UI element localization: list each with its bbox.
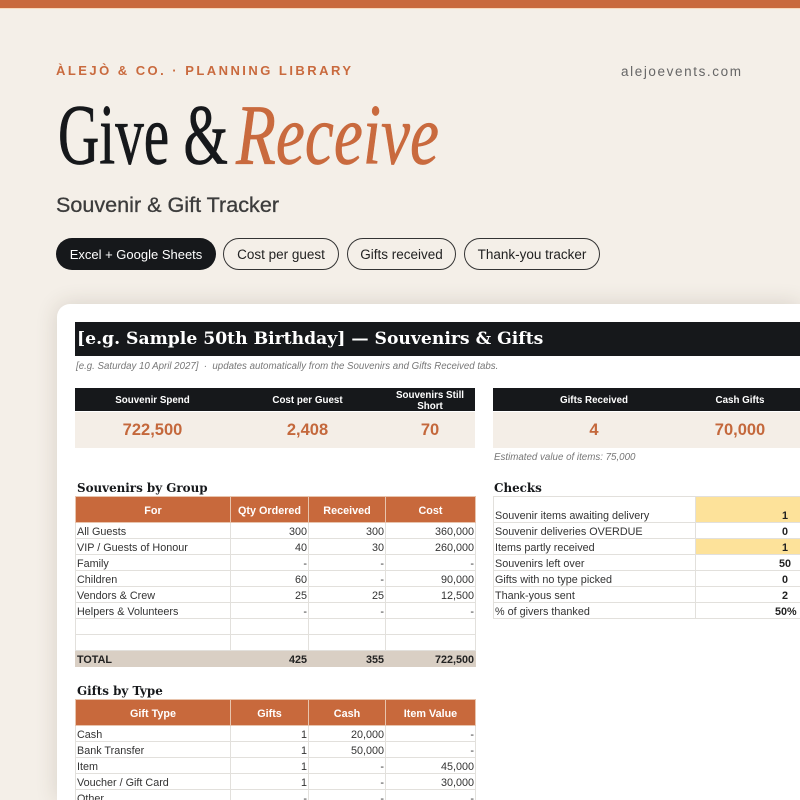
title: Give &: Give & (58, 86, 228, 182)
table: Souvenirs by Group: 30 (372, 542, 384, 554)
table: Souvenirs by Group: - (380, 574, 384, 586)
KPI block: souvenirs: Cost per Guest (272, 395, 343, 406)
table: Checks (493, 496, 800, 619)
KPI block: souvenirs: Short (417, 400, 443, 412)
KPI block: gifts: Cash Gifts (716, 395, 764, 406)
table: Gifts by Type: 20,000 (351, 729, 384, 741)
KPI block: gifts (493, 388, 800, 448)
table: Souvenirs by Group: Family (77, 558, 109, 570)
table: Souvenirs by Group: 90,000 (441, 574, 474, 586)
table: Souvenirs by Group: 360,000 (435, 526, 474, 538)
table: Checks: Gifts with no type picked (495, 574, 612, 586)
table: Souvenirs by Group: 722,500 (435, 654, 474, 666)
table: Checks: 1 (782, 542, 788, 554)
pill: Gifts received (347, 238, 456, 270)
table: Souvenirs by Group: For (144, 505, 162, 517)
table: Gifts by Type: 45,000 (441, 761, 474, 773)
table: Checks: 2 (782, 590, 788, 602)
KPI block: souvenirs (75, 388, 475, 448)
sheet subtitle: [e.g. Saturday 10 April 2027] · updates automatically from the Souvenirs and Gifts Received tabs. (76, 361, 498, 372)
table: Souvenirs by Group: - (380, 558, 384, 570)
table: Souvenirs by Group: 300 (366, 526, 384, 538)
table: Gifts by Type: Voucher / Gift Card (77, 777, 169, 789)
table: Gifts by Type: Gift Type (130, 708, 176, 720)
table: Gifts by Type: 50,000 (351, 745, 384, 757)
table: Checks: 50% (775, 606, 797, 618)
table: Gifts by Type: Cash (334, 708, 360, 720)
table: Gifts by Type: Cash (77, 729, 102, 741)
sheet title bar (75, 322, 800, 356)
KPI block: souvenirs: 722,500 (123, 421, 182, 439)
table: Checks: % of givers thanked (495, 606, 590, 618)
table: Gifts by Type: Bank Transfer (77, 745, 144, 757)
table: Souvenirs by Group: Children (77, 574, 117, 586)
table: Souvenirs by Group: Received (323, 505, 371, 517)
panel: spreadsheet card (57, 304, 800, 800)
pill: Excel + Google Sheets: Excel + Google Sheets (70, 247, 202, 262)
table: Souvenirs by Group: 425 (289, 654, 307, 666)
table: Gifts by Type: 1 (301, 729, 307, 741)
pill: Excel + Google Sheets (56, 238, 216, 270)
sheet title bar: [e.g. Sample 50th Birthday] — Souvenirs & Gifts (77, 329, 543, 349)
table: Gifts by Type: 30,000 (441, 777, 474, 789)
table: Souvenirs by Group: Qty Ordered (238, 505, 301, 517)
pill: Cost per guest (223, 238, 339, 270)
heading: Checks: Checks (494, 481, 542, 495)
table: Checks: Items partly received (495, 542, 595, 554)
table: Souvenirs by Group: 12,500 (441, 590, 474, 602)
website: alejoevents.com (621, 64, 741, 79)
pill: Gifts received: Gifts received (360, 247, 443, 262)
table: Gifts by Type: - (380, 777, 384, 789)
table: Gifts by Type: 1 (301, 777, 307, 789)
heading: Souvenirs by Group: Souvenirs by Group (77, 481, 208, 495)
table: Checks: 0 (782, 574, 788, 586)
table: Souvenirs by Group: Helpers & Volunteers (77, 606, 178, 618)
KPI block: souvenirs: Souvenir Spend (115, 395, 190, 406)
table: Souvenirs by Group: - (303, 558, 307, 570)
table: Gifts by Type: Gifts (257, 708, 282, 720)
table: Souvenirs by Group: 300 (289, 526, 307, 538)
eyebrow: ÀLEJÒ & CO. · PLANNING LIBRARY (56, 63, 351, 78)
table: Checks: Thank-yous sent (495, 590, 575, 602)
table: Gifts by Type: - (470, 745, 474, 757)
table: Gifts by Type (75, 699, 476, 800)
KPI block: souvenirs: 2,408 (287, 421, 328, 439)
table: Souvenirs by Group: 355 (366, 654, 384, 666)
table: Souvenirs by Group: - (470, 606, 474, 618)
table: Gifts by Type: Item Value (404, 708, 457, 720)
KPI block: gifts: Gifts Received (560, 395, 628, 406)
table: Gifts by Type: - (470, 729, 474, 741)
table: Souvenirs by Group: 60 (295, 574, 307, 586)
table: Souvenirs by Group: 25 (295, 590, 307, 602)
table: Souvenirs by Group (75, 496, 476, 667)
KPI block: gifts: 70,000 (715, 421, 765, 439)
pill: Cost per guest: Cost per guest (237, 247, 325, 262)
table: Checks: Souvenir items awaiting delivery (495, 510, 649, 522)
table: Souvenirs by Group: 25 (372, 590, 384, 602)
KPI block: souvenirs: 70 (421, 421, 439, 439)
top accent bar (0, 0, 800, 9)
table: Checks: Souvenirs left over (495, 558, 584, 570)
table: Gifts by Type: 1 (301, 761, 307, 773)
subtitle: Souvenir & Gift Tracker (56, 194, 279, 217)
table: Souvenirs by Group: TOTAL (77, 654, 112, 666)
estimated value note: Estimated value of items: 75,000 (494, 452, 635, 463)
table: Checks: 1 (782, 510, 788, 522)
table: Souvenirs by Group: VIP / Guests of Honour (77, 542, 188, 554)
table: Checks: 50 (779, 558, 791, 570)
table: Gifts by Type: Item (77, 761, 98, 773)
table: Souvenirs by Group: 40 (295, 542, 307, 554)
header text group (56, 63, 741, 217)
heading: Gifts by Type: Gifts by Type (77, 684, 163, 698)
table: Gifts by Type: 1 (301, 745, 307, 757)
table: Souvenirs by Group: - (380, 606, 384, 618)
table: Souvenirs by Group: - (470, 558, 474, 570)
table: Gifts by Type: - (380, 761, 384, 773)
table: Souvenirs by Group: 260,000 (435, 542, 474, 554)
title: Receive: Receive (235, 86, 439, 182)
KPI block: souvenirs: Souvenirs Still (396, 390, 464, 401)
table: Souvenirs by Group: All Guests (77, 526, 126, 538)
table: Checks: Souvenir deliveries OVERDUE (495, 526, 643, 538)
table: Souvenirs by Group: Cost (418, 505, 442, 517)
table: Souvenirs by Group: - (303, 606, 307, 618)
KPI block: gifts: 4 (589, 421, 599, 439)
pill: Thank-you tracker: Thank-you tracker (478, 247, 586, 262)
table: Souvenirs by Group: Vendors & Crew (77, 590, 155, 602)
table: Checks: 0 (782, 526, 788, 538)
pill: Thank-you tracker (464, 238, 600, 270)
